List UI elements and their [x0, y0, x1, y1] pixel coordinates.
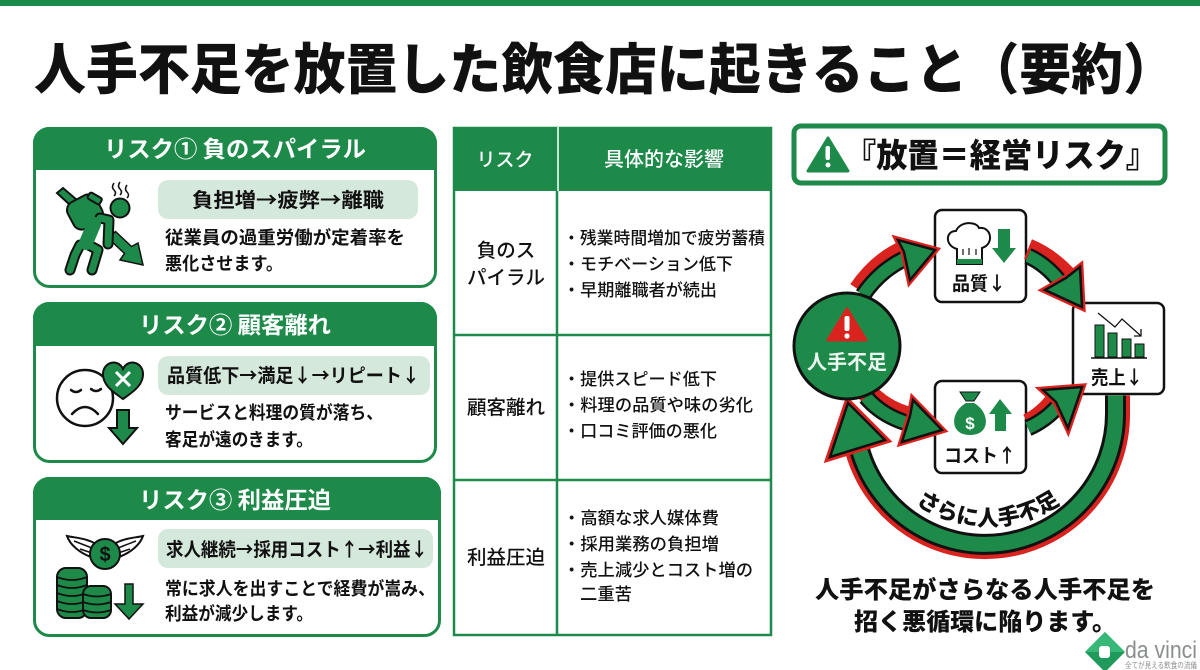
table row: profit squeeze: ・売上減少とコスト増の: [563, 556, 753, 581]
heading: risk 3: リスク③ 利益圧迫: [139, 481, 331, 515]
table row: negative spiral: ・残業時間増加で疲労蓄積: [563, 224, 765, 249]
node: quality down: [935, 210, 1026, 302]
table row: negative spiral: ・早期離職者が続出: [563, 276, 717, 301]
node: labor shortage: 人手不足: [807, 346, 887, 375]
icon: unhappy customer: [57, 363, 143, 444]
arrow: cost to sales: [1028, 387, 1082, 428]
description: risk 2: 客足が遠のきます。: [165, 426, 313, 452]
panel: risk 3: [33, 477, 441, 636]
table row: profit squeeze: ・高額な求人媒体費: [563, 504, 719, 529]
description: risk 3: 常に求人を出すことで経費が嵩み、: [165, 575, 435, 601]
description: risk 3: 利益が減少します。: [165, 600, 313, 626]
caption: 招く悪循環に陥ります。: [854, 602, 1116, 637]
table header: 具体的な影響: [604, 143, 724, 172]
panel: risk table: [453, 127, 772, 636]
table row: customer loss: ・料理の品質や味の劣化: [563, 391, 753, 416]
callout pill: risk 2: [158, 356, 430, 395]
description: risk 3: [165, 575, 435, 626]
node: cost up: コスト↑: [944, 441, 1016, 468]
icon: money flying away: $: [99, 544, 111, 566]
arrow: shortage to quality: [859, 240, 935, 295]
node: sales down: [1073, 303, 1164, 394]
table row: negative spiral: 負のス: [477, 234, 535, 263]
node: cost up: $: [965, 414, 975, 433]
heading: risk 2: リスク② 顧客離れ: [139, 306, 331, 340]
top accent bar: [0, 0, 1200, 6]
table header: [453, 127, 772, 191]
caption: [815, 570, 1155, 637]
callout text: risk 3: 求人継続→採用コスト↑→利益↓: [166, 535, 428, 562]
table row: negative spiral: ・モチベーション低下: [563, 250, 733, 275]
arrow: shortage to cost: [866, 391, 942, 442]
table row: profit squeeze: 二重苦: [580, 580, 632, 605]
panel: risk 2: [33, 302, 437, 462]
arrow: quality to sales: [1028, 249, 1082, 307]
table row: customer loss: 顧客離れ: [467, 391, 545, 420]
callout pill: risk 1: [158, 180, 418, 219]
table row: profit squeeze: ・採用業務の負担増: [563, 530, 719, 555]
panel: neglect equals management risk: [794, 126, 1165, 183]
description: risk 1: 悪化させます。: [165, 250, 283, 276]
panel: risk 1: [33, 127, 437, 286]
table row: negative spiral: [467, 224, 765, 301]
chart: vicious cycle diagram: [792, 208, 1166, 560]
callout pill: risk 3: [158, 529, 433, 568]
callout text: risk 1: 負担増→疲弊→離職: [192, 184, 384, 213]
table row: negative spiral: パイラル: [467, 261, 545, 290]
table row: customer loss: ・口コミ評価の悪化: [563, 417, 717, 442]
icon: money flying away: [57, 536, 143, 619]
table row: customer loss: [467, 365, 753, 442]
label: further shortage on curve: さらに人手不足: [920, 490, 1060, 528]
callout text: risk 2: 品質低下→満足↓→リピート↓: [167, 361, 420, 388]
table header: リスク: [476, 145, 534, 172]
heading: neglect equals risk: 『放置＝経営リスク』: [845, 129, 1157, 177]
table row: profit squeeze: 利益圧迫: [467, 541, 545, 570]
heading: risk 1: リスク① 負のスパイラル: [104, 130, 366, 164]
table row: profit squeeze: [467, 504, 753, 605]
caption: 人手不足がさらなる人手不足を: [815, 570, 1155, 605]
arrow: more shortage feedback loop: [830, 396, 1120, 549]
icon: overworked person: [57, 182, 143, 270]
label: further shortage on curve: [920, 490, 1060, 528]
logo: da vinci: [1085, 632, 1197, 670]
description: risk 2: サービスと料理の質が落ち、: [165, 399, 383, 425]
icon: warning triangle: [808, 138, 848, 171]
node: cost up: [935, 381, 1026, 473]
node: labor shortage: [794, 293, 900, 399]
description: risk 1: 従業員の過重労働が定着率を: [165, 224, 405, 250]
description: risk 1: [165, 224, 405, 276]
description: risk 2: [165, 399, 383, 452]
table row: customer loss: ・提供スピード低下: [563, 365, 717, 390]
node: quality down: 品質↓: [952, 269, 1006, 296]
node: sales down: 売上↓: [1091, 363, 1143, 390]
